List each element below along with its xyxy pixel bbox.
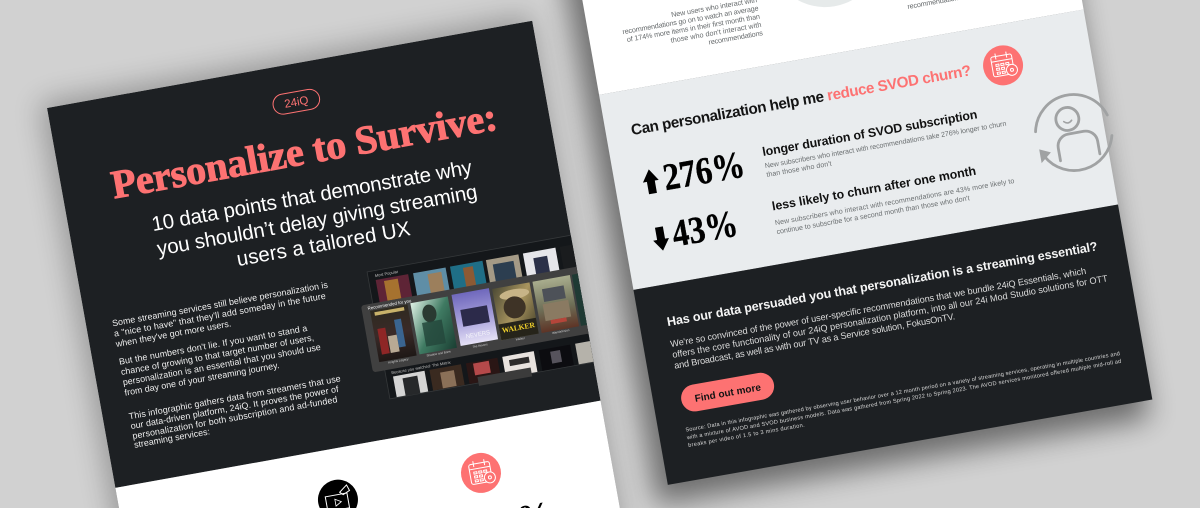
stat: 276%: 276% bbox=[660, 144, 748, 199]
TV stand bbox=[477, 367, 532, 386]
page shadow: left page bbox=[40, 15, 623, 508]
poster: Knights Legacy bbox=[370, 304, 417, 366]
panel: dark header bbox=[47, 21, 601, 488]
intro text: personalization is an essential that you should use bbox=[122, 342, 322, 387]
intro text: personalization for both subscription and ad-funded bbox=[132, 394, 338, 441]
text: longer duration: than those who don't bbox=[766, 160, 832, 179]
intro text: when they've got more users. bbox=[114, 318, 232, 349]
stat: 43%: 43% bbox=[669, 203, 741, 255]
panel: recommended for you bbox=[362, 266, 588, 372]
intro text: Some streaming services still believe personalization is bbox=[111, 280, 329, 328]
panel: right page bbox=[571, 0, 1158, 485]
subtitle: users a tailored UX bbox=[235, 217, 412, 271]
stat: 276% bbox=[639, 144, 748, 203]
icon: person in cycle bbox=[1030, 89, 1117, 177]
intro text: chance of growing to that target number of users, bbox=[120, 332, 315, 377]
poster: The Nevers: NEVERS bbox=[465, 330, 491, 340]
text: new users bbox=[620, 0, 764, 61]
text: new users: of 174% more items in their first month than bbox=[626, 12, 761, 44]
intro text: a "nice to have" that they'll add someday in the future bbox=[113, 291, 327, 339]
poster: Walker: Walker bbox=[515, 336, 525, 342]
intro text: from day one of your streaming journey. bbox=[124, 360, 280, 398]
panel: white top section bbox=[571, 0, 1084, 95]
source note: Source: Data in this infographic was gathered by observing user behavior over a 12 month period on a variety of streaming services, operating in multiple countries and bbox=[685, 351, 1121, 434]
row: because you watched: Because you watched: The Matrix bbox=[391, 360, 451, 375]
intro text bbox=[110, 280, 351, 450]
page shadow: right page bbox=[557, 0, 1150, 505]
logo pill: 24iQ bbox=[283, 95, 310, 111]
row: most popular: Most Popular bbox=[374, 269, 399, 278]
chart circle bbox=[760, 0, 890, 16]
intro text: But the numbers don't lie. If you want to stand a bbox=[118, 323, 308, 367]
panel: SVOD churn bbox=[599, 8, 1124, 290]
panel: white section bbox=[115, 401, 624, 508]
title: Personalize to Survive: bbox=[108, 94, 501, 207]
text: less likely: New subscribers who interact with recommendations are 43% more likely to bbox=[774, 177, 1015, 227]
text: new users: those who don't interact with bbox=[670, 20, 762, 45]
subtitle: 10 data points that demonstrate why bbox=[150, 156, 474, 236]
TV screen bbox=[366, 234, 594, 400]
source note: with a mixture of AVOD and SVOD business models. Data was gathered from Spring 2022 to Spring 2023. The AVOD services monitored offered multiple mid-roll ad bbox=[686, 359, 1122, 441]
paragraph: and Broadcast, as well as with our TV as a Service solution, FokusOnTV. bbox=[673, 311, 956, 371]
poster: Walker: WALKER bbox=[501, 320, 536, 335]
button: Find out more bbox=[694, 382, 762, 405]
text: longer duration: longer duration of SVOD subscription bbox=[761, 107, 978, 159]
poster: WandaVision: WandaVision bbox=[552, 328, 570, 335]
intro text: our data-driven platform, 24iQ. It proves the power of bbox=[130, 384, 340, 431]
text: less likely: less likely to churn after one month bbox=[771, 164, 977, 213]
panel: dark CTA section bbox=[633, 204, 1152, 485]
heading: Can personalization help me reduce SVOD churn? bbox=[630, 62, 972, 139]
paragraph: We're so convinced of the power of user-specific recommendations that we bundle 24iQ Essentials, which bbox=[670, 266, 1087, 349]
text: new users: recommendations go on to watch an average bbox=[622, 3, 759, 36]
source note: breaks per video of 1.5 to 3 mins duration. bbox=[688, 423, 806, 449]
logo pill bbox=[271, 88, 321, 116]
intro text: This infographic gathers data from streamers that use bbox=[128, 373, 341, 421]
icon: calendar on coral circle bbox=[461, 452, 501, 493]
poster: green fantasy: Shadow and Bone bbox=[426, 349, 451, 358]
poster: The Nevers: The Nevers bbox=[472, 342, 488, 349]
panel: recommended for you: Recommended for you bbox=[367, 298, 412, 311]
poster: Walker bbox=[492, 282, 539, 344]
poster: Knights Legacy: Knights Legacy bbox=[388, 357, 409, 365]
stat: 43% bbox=[649, 203, 741, 259]
intro text: streaming services: bbox=[133, 426, 211, 450]
button bbox=[679, 371, 776, 414]
heading: Has our data persuaded you that personalization is a streaming essential? bbox=[666, 239, 1099, 329]
icon: megaphone on black circle bbox=[318, 480, 358, 508]
icon: calendar bbox=[980, 42, 1026, 88]
text: less likely bbox=[771, 157, 1017, 236]
TV mockup bbox=[362, 234, 594, 400]
panel: left page bbox=[47, 17, 647, 508]
row: because you watched bbox=[392, 341, 594, 398]
poster: The Nevers bbox=[451, 288, 499, 351]
text: longer duration: New subscribers who interact with recommendations take 276% longer to churn bbox=[764, 120, 1007, 170]
text: longer duration bbox=[761, 103, 1009, 179]
text: less likely: continue to subscribe for a second month than those who don't bbox=[776, 194, 970, 236]
paragraph: offers the core functionality of our 24iQ personalization platform, into all our 24i Mod Studio solutions for OTT bbox=[671, 273, 1109, 360]
poster: WandaVision bbox=[532, 275, 580, 337]
subtitle: you shouldn’t delay giving streaming bbox=[155, 180, 479, 261]
poster: green fantasy bbox=[410, 297, 458, 359]
text: new users: recommendations bbox=[708, 28, 764, 47]
row: most popular bbox=[375, 245, 577, 302]
